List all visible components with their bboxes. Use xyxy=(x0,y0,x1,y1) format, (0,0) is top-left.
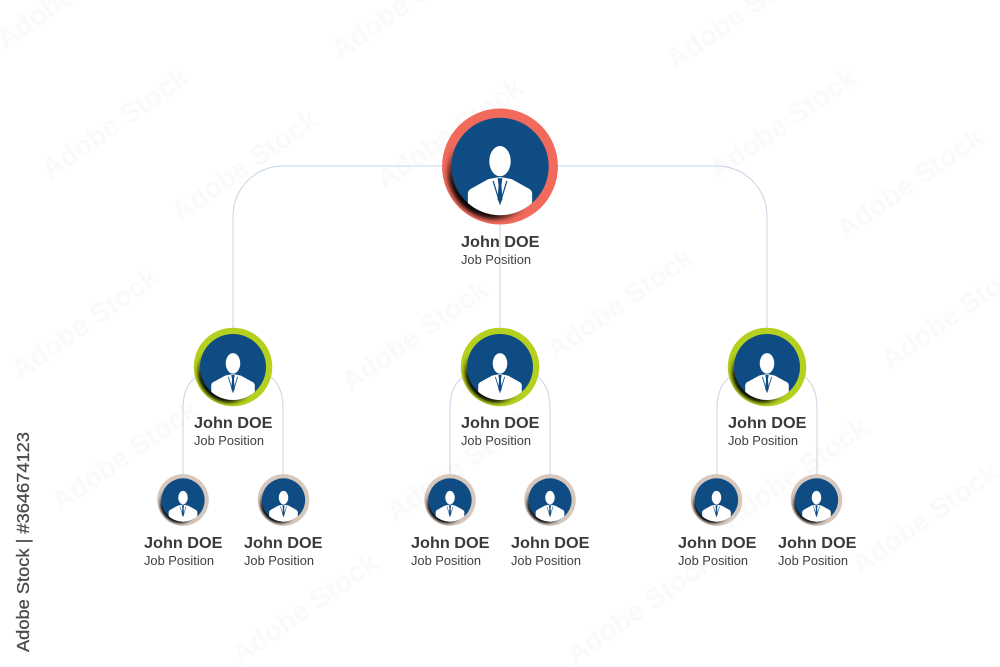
small node 3: Job Position xyxy=(411,553,481,568)
small node 4: John DOE xyxy=(511,535,590,552)
small node 1: Job Position xyxy=(144,553,214,568)
mid node centre: Job Position xyxy=(461,433,531,448)
mid node centre xyxy=(461,328,540,448)
small node 6: John DOE xyxy=(778,535,857,552)
small node 5: John DOE xyxy=(678,535,757,552)
watermark pattern: Adobe Stock xyxy=(46,393,204,517)
top node: John DOE xyxy=(442,109,558,267)
watermark pattern: Adobe Stock xyxy=(336,273,494,397)
small node 2 xyxy=(244,474,323,568)
small node 4 xyxy=(511,474,590,568)
watermark pattern: Adobe Stock xyxy=(166,103,324,227)
watermark pattern: Adobe Stock xyxy=(846,456,1000,580)
watermark pattern: Adobe Stock xyxy=(371,71,529,195)
small node 6 xyxy=(778,474,857,568)
mid node left xyxy=(194,328,273,448)
watermark pattern: Adobe Stock xyxy=(226,546,384,667)
mid node right: John DOE xyxy=(728,415,807,432)
top node: John DOE: Job Position xyxy=(461,252,531,267)
watermark pattern: Adobe Stock xyxy=(381,403,539,527)
small node 4: Job Position xyxy=(511,553,581,568)
watermark pattern: Adobe Stock xyxy=(561,546,719,667)
mid node right: Job Position xyxy=(728,433,798,448)
watermark pattern: Adobe Stock xyxy=(6,261,164,385)
watermark pattern: Adobe Stock xyxy=(541,241,699,365)
small node 5: Job Position xyxy=(678,553,748,568)
small node 1 xyxy=(144,474,223,568)
mid node centre: John DOE xyxy=(461,415,540,432)
stock id side text: Adobe Stock | #364674123 xyxy=(13,432,33,652)
small node 3 xyxy=(411,474,490,568)
mid node left: Job Position xyxy=(194,433,264,448)
watermark pattern: Adobe Stock xyxy=(716,411,874,535)
mid node left: John DOE xyxy=(194,415,273,432)
watermark pattern: Adobe Stock xyxy=(831,121,989,245)
small node 3: John DOE xyxy=(411,535,490,552)
top node: John DOE: John DOE xyxy=(461,234,540,251)
watermark pattern: Adobe Stock xyxy=(36,61,194,185)
connector lines xyxy=(183,166,817,476)
small node 2: John DOE xyxy=(244,535,323,552)
watermark pattern: Adobe Stock xyxy=(704,61,862,185)
small node 1: John DOE xyxy=(144,535,223,552)
mid node right xyxy=(728,328,807,448)
small node 6: Job Position xyxy=(778,553,848,568)
small node 2: Job Position xyxy=(244,553,314,568)
small node 5 xyxy=(678,474,757,568)
